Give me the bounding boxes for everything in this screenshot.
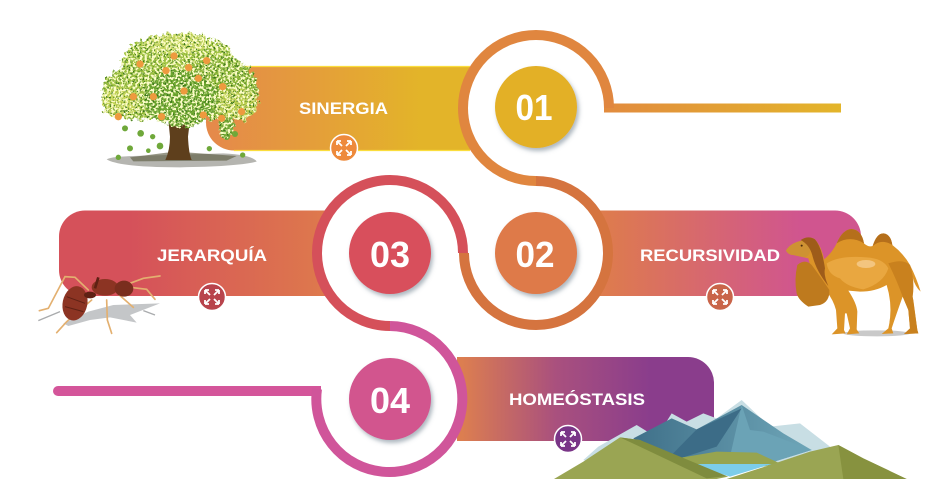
- heading: jerarquia: JERARQUÍA: [157, 246, 267, 265]
- icon: camel: [786, 229, 921, 336]
- panel: jerarquia bar: [59, 210, 335, 296]
- ring: 02: [464, 181, 608, 325]
- number badge 01: 01: [516, 87, 552, 128]
- icon: mountains: [554, 400, 907, 479]
- icon: expand jerarquia: [198, 284, 226, 310]
- heading: homeostasis: HOMEÓSTASIS: [509, 390, 645, 409]
- ring: 03: [317, 180, 463, 326]
- connector line: bottom left: [53, 386, 321, 396]
- icon: ant: [38, 276, 160, 333]
- number badge 04: 04: [370, 380, 410, 421]
- ring: 01: [463, 35, 609, 181]
- panel: homeostasis bar: [457, 357, 714, 441]
- number badge 04: [349, 358, 431, 440]
- icon: expand homeostasis: [554, 426, 582, 452]
- heading: recursividad: RECURSIVIDAD: [640, 246, 780, 265]
- number badge 03: 03: [370, 234, 410, 275]
- heading: sinergia: SINERGIA: [299, 99, 388, 118]
- number badge 03: [349, 212, 431, 294]
- panel: recursividad bar: [600, 210, 861, 296]
- panel: sinergia bar: [206, 66, 470, 150]
- ring interiors: [317, 35, 609, 472]
- connector line: top right: [604, 104, 841, 112]
- icon: expand sinergia: [330, 134, 358, 162]
- number badge 02: [495, 212, 577, 294]
- icon: tree: [102, 33, 258, 167]
- icon: expand recursividad: [706, 284, 734, 310]
- ring: 04: [316, 326, 462, 472]
- number badge 01: [495, 66, 577, 148]
- number badge 02: 02: [516, 234, 554, 275]
